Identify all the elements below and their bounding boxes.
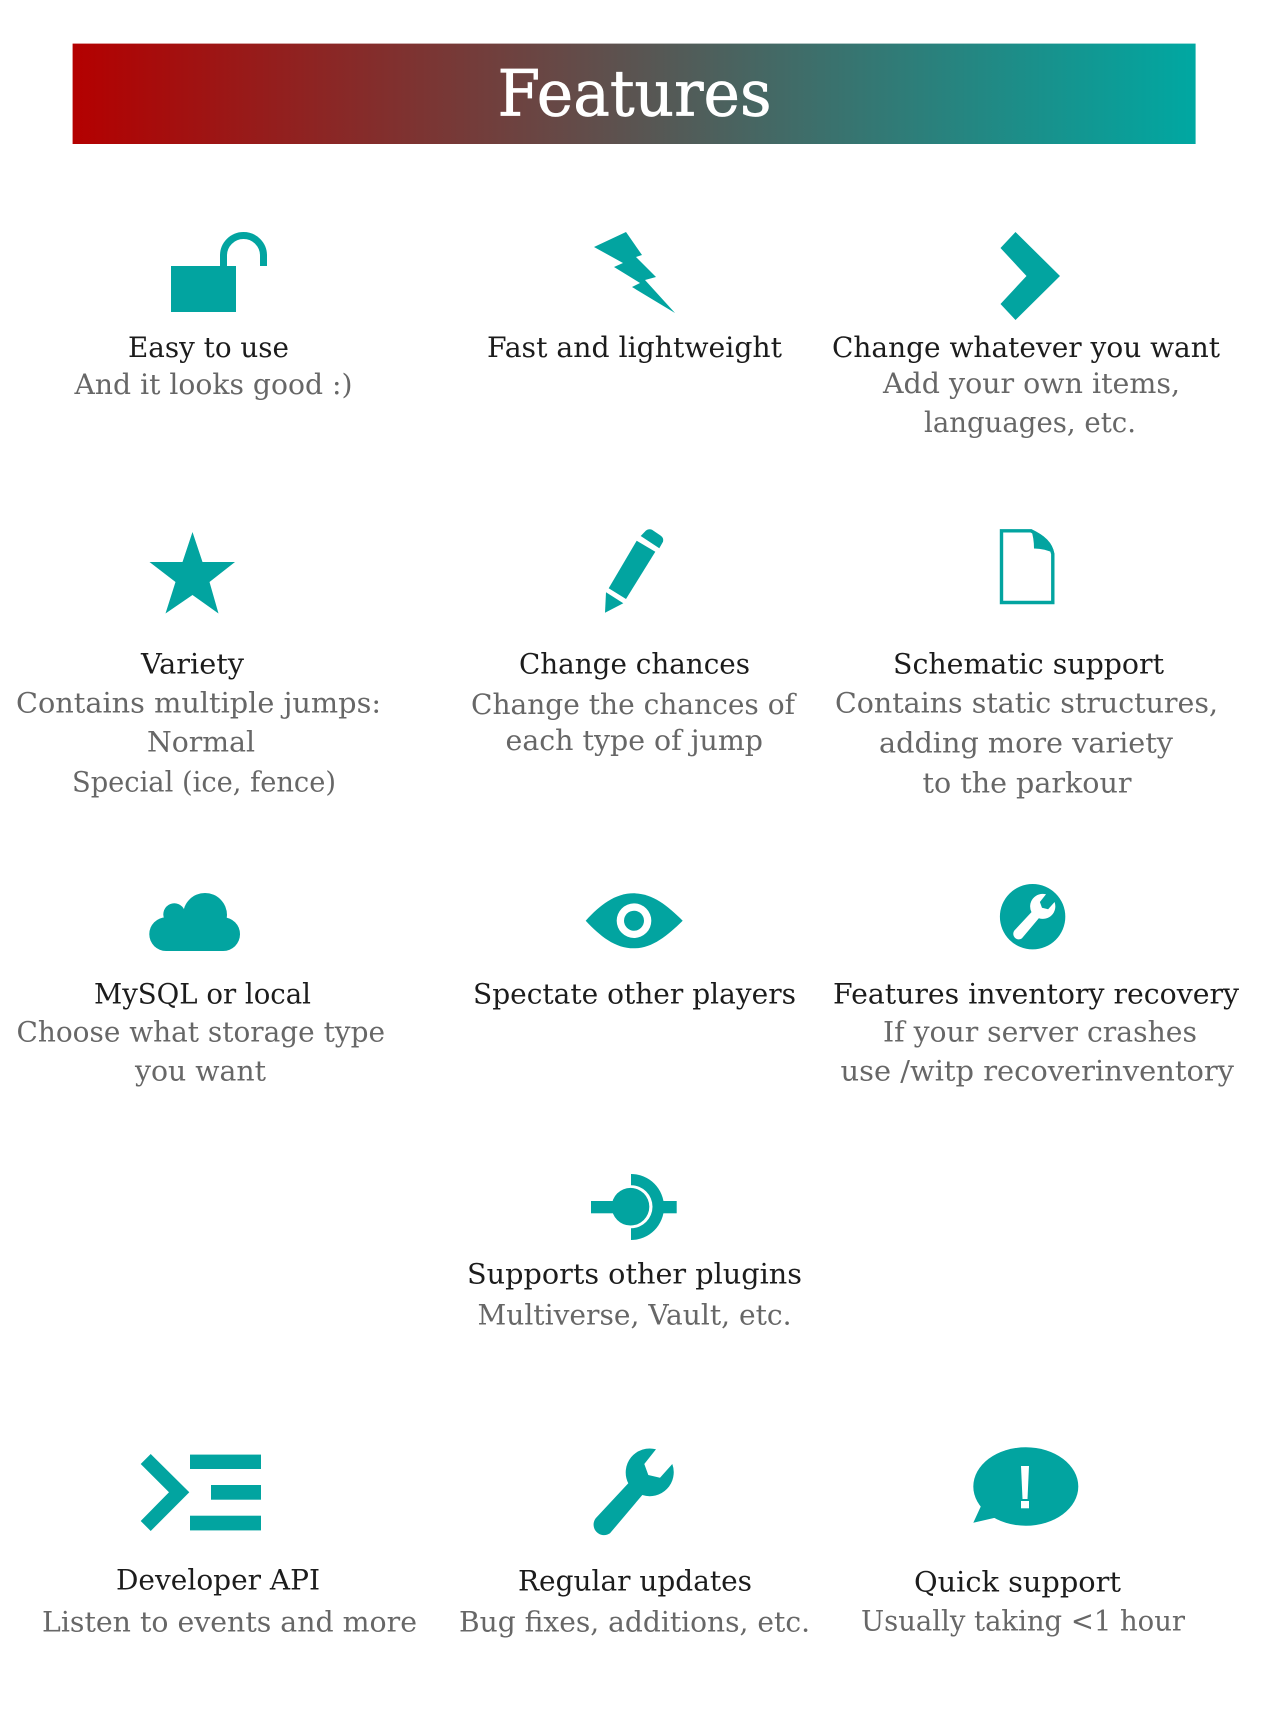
description: And it looks good :)	[73, 368, 353, 401]
description: languages, etc.	[924, 406, 1136, 439]
description: Special (ice, fence)	[72, 766, 336, 798]
feature: spectate other players	[473, 893, 796, 1010]
feature: quick support	[861, 1447, 1186, 1637]
feature: schematic support	[835, 529, 1218, 800]
description: Add your own items,	[882, 367, 1180, 400]
heading: Spectate other players	[473, 977, 796, 1010]
icon: lightning bolt	[594, 232, 675, 313]
description	[840, 1015, 1234, 1087]
icon: document	[1002, 529, 1054, 602]
icon: cloud	[149, 893, 240, 951]
icon: star	[150, 532, 235, 614]
icon: plug connector	[591, 1174, 677, 1240]
description	[471, 688, 798, 757]
description: Normal	[147, 726, 255, 758]
heading: Variety	[140, 648, 244, 680]
description: Listen to events and more	[42, 1605, 417, 1638]
feature: mysql or local	[16, 893, 385, 1087]
heading: Regular updates	[518, 1564, 752, 1598]
description	[16, 1015, 385, 1087]
feature: variety	[16, 532, 381, 798]
description	[835, 686, 1218, 800]
feature: supports other plugins	[467, 1174, 802, 1332]
heading: Features inventory recovery	[833, 977, 1239, 1010]
heading: Change whatever you want	[832, 331, 1221, 364]
header banner	[73, 44, 1196, 144]
description: Choose what storage type	[16, 1015, 385, 1048]
description: to the parkour	[922, 766, 1132, 800]
description: you want	[134, 1054, 267, 1087]
heading: Schematic support	[893, 648, 1165, 680]
description: If your server crashes	[883, 1015, 1197, 1048]
description: adding more variety	[879, 726, 1173, 760]
description: use /witp recoverinventory	[840, 1054, 1234, 1087]
description: Contains static structures,	[835, 686, 1218, 720]
icon: open padlock	[171, 236, 264, 312]
icon: eye	[586, 893, 683, 948]
heading: Fast and lightweight	[487, 331, 783, 364]
heading: Quick support	[914, 1566, 1122, 1598]
heading: MySQL or local	[94, 977, 311, 1010]
feature: inventory recovery	[833, 884, 1239, 1087]
heading: Supports other plugins	[467, 1258, 802, 1291]
description: Change the chances of	[471, 688, 798, 721]
feature: change chances	[471, 529, 798, 757]
icon: chevron	[1000, 232, 1060, 320]
description	[882, 367, 1180, 439]
icon: pencil	[605, 529, 663, 613]
description	[16, 686, 381, 798]
feature: developer api	[42, 1454, 417, 1638]
title: Features	[498, 58, 772, 132]
icon: code prompt	[141, 1454, 261, 1531]
heading: Developer API	[116, 1563, 320, 1596]
icon: wrench in circle	[1000, 884, 1065, 949]
icon: speech bubble	[973, 1447, 1078, 1526]
description: each type of jump	[506, 724, 763, 757]
heading: Change chances	[519, 648, 750, 680]
description: Bug fixes, additions, etc.	[459, 1605, 810, 1638]
icon: wrench	[594, 1448, 674, 1535]
heading: Easy to use	[128, 331, 289, 364]
description: Usually taking <1 hour	[861, 1604, 1186, 1637]
description: Multiverse, Vault, etc.	[478, 1299, 792, 1332]
feature: fast and lightweight	[487, 232, 783, 364]
feature: change whatever you want	[832, 232, 1221, 439]
description: Contains multiple jumps:	[16, 686, 381, 720]
feature: easy to use	[73, 236, 353, 401]
feature: regular updates	[459, 1448, 810, 1638]
